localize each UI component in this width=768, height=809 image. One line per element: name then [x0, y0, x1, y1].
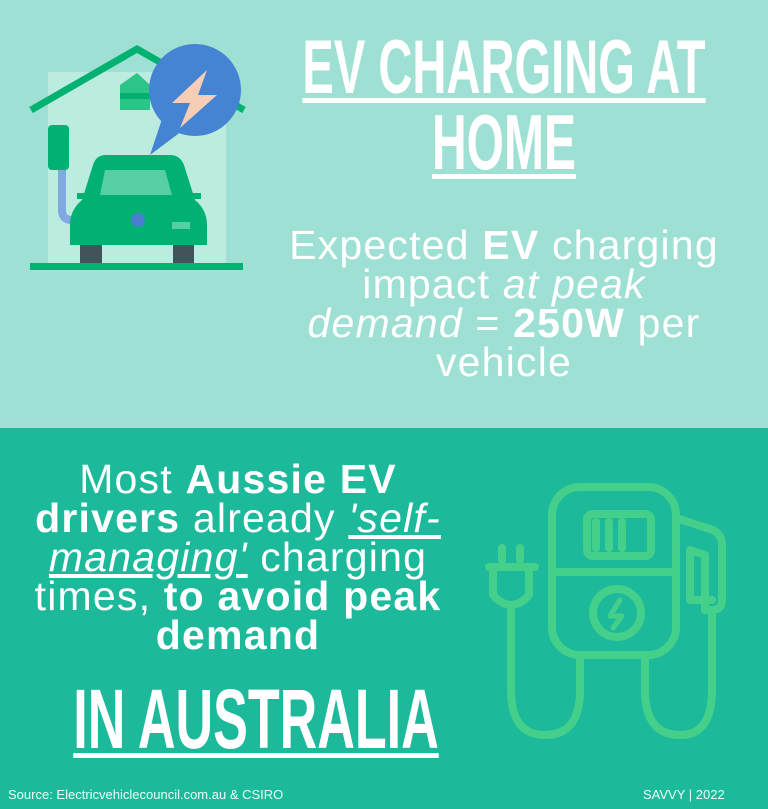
heading: in australia: IN AUSTRALIA: [73, 672, 439, 766]
footer: credit: SAVVY | 2022: [643, 787, 725, 802]
text: peak demand impact: [289, 222, 719, 385]
text: peak demand impact: impact at peak: [362, 261, 646, 307]
text: self-managing: [35, 456, 441, 658]
text: peak demand impact: demand = 250W per: [307, 300, 701, 346]
footer: source: Source: Electricvehiclecouncil.com.au & CSIRO: [8, 787, 283, 802]
text: self-managing: demand: [156, 612, 320, 658]
title: [302, 25, 706, 186]
text: self-managing: managing' charging: [49, 534, 427, 580]
title: EV CHARGING AT: [302, 25, 706, 110]
text: peak demand impact: Expected EV charging: [289, 222, 719, 268]
icon: house with car charging: [29, 44, 246, 270]
text: self-managing: Most Aussie EV: [79, 456, 397, 502]
title: HOME: [432, 98, 576, 186]
icon: charging station: [485, 483, 726, 739]
text: self-managing: times, to avoid peak: [35, 573, 441, 619]
text: self-managing: drivers already 'self-: [35, 495, 441, 541]
text: peak demand impact: vehicle: [436, 339, 572, 385]
